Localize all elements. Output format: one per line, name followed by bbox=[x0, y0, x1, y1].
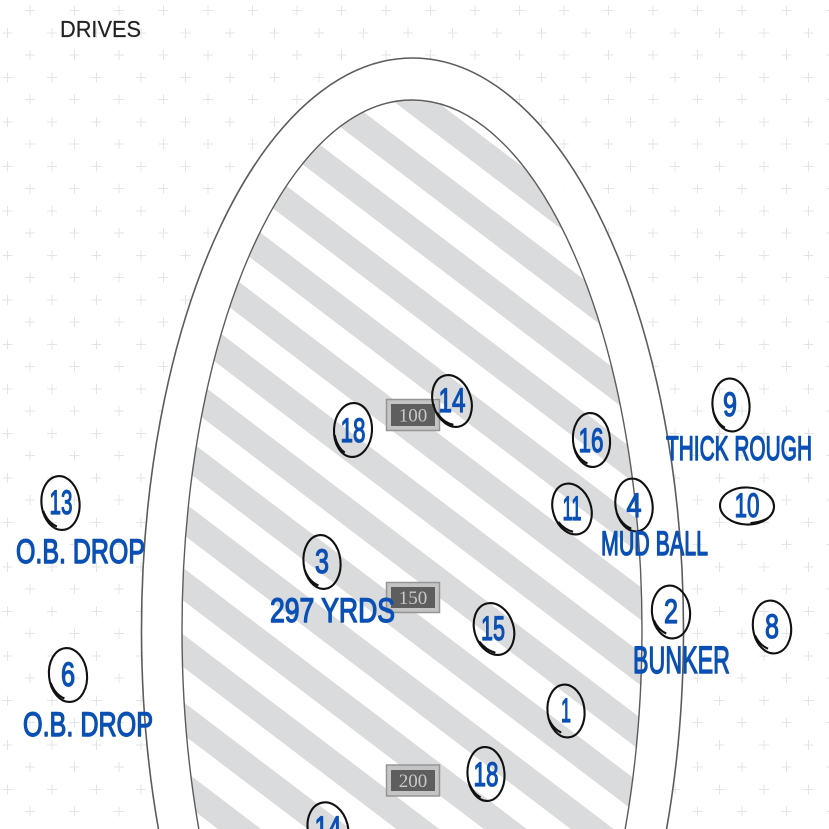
drive 9 with thick rough label: 9 bbox=[723, 386, 737, 424]
drive 9 with thick rough label bbox=[666, 377, 812, 468]
drive 2 with bunker label bbox=[633, 584, 730, 682]
drive 2 with bunker label: 2 bbox=[664, 593, 678, 631]
fairway stripes bbox=[182, 100, 642, 829]
label: o.b. drop: O.B. DROP bbox=[16, 533, 145, 571]
yardage marker 200 bbox=[386, 765, 440, 796]
drive 3 with 297 yards label: 3 bbox=[315, 543, 329, 581]
drive 8: 8 bbox=[765, 608, 779, 646]
drive 4 with mud ball label bbox=[601, 476, 708, 563]
drive 18 bbox=[333, 402, 373, 458]
drive 4 with mud ball label: 4 bbox=[626, 487, 642, 525]
yardage marker 200: 200 bbox=[399, 771, 427, 792]
drive 11 bbox=[546, 478, 598, 540]
drive 10 bbox=[719, 487, 775, 525]
drive 3 with 297 yards label bbox=[270, 533, 395, 630]
drive 13 with o.b. drop label bbox=[16, 474, 145, 571]
drive 18 lower bbox=[466, 746, 506, 802]
drive 1 bbox=[545, 683, 587, 739]
drive 15: 15 bbox=[481, 610, 505, 648]
yardage marker 100 bbox=[386, 400, 440, 430]
yardage marker 150: 150 bbox=[399, 588, 427, 609]
drive 14 bbox=[426, 370, 478, 432]
drive 14: 14 bbox=[438, 382, 466, 420]
label: bunker: BUNKER bbox=[633, 640, 730, 682]
label: o.b. drop: O.B. DROP bbox=[23, 706, 153, 744]
drive 8 bbox=[749, 598, 795, 656]
drive 1: 1 bbox=[561, 692, 571, 730]
drive 18 lower: 18 bbox=[474, 756, 498, 794]
drive 6 with o.b. drop label: 6 bbox=[61, 656, 75, 694]
drive 16 bbox=[571, 411, 612, 469]
rough: outer ellipse bbox=[142, 58, 684, 829]
fairway: inner ellipse bbox=[182, 100, 642, 829]
label: 297 yards: 297 YRDS bbox=[270, 592, 395, 630]
drive 15 bbox=[467, 598, 521, 660]
drive 14 lower bbox=[302, 798, 354, 829]
drive 6 with o.b. drop label bbox=[23, 646, 153, 744]
drive 18: 18 bbox=[340, 412, 366, 450]
fairway diagram bbox=[142, 0, 700, 829]
drive 16: 16 bbox=[578, 422, 604, 460]
title: DRIVES bbox=[60, 16, 141, 42]
yardage marker 150 bbox=[386, 582, 440, 612]
label: mud ball: MUD BALL bbox=[601, 525, 708, 563]
drive 10: 10 bbox=[734, 487, 760, 525]
drive 13 with o.b. drop label: 13 bbox=[50, 484, 72, 522]
yardage marker 100: 100 bbox=[399, 406, 427, 426]
drive 11: 11 bbox=[562, 490, 582, 528]
